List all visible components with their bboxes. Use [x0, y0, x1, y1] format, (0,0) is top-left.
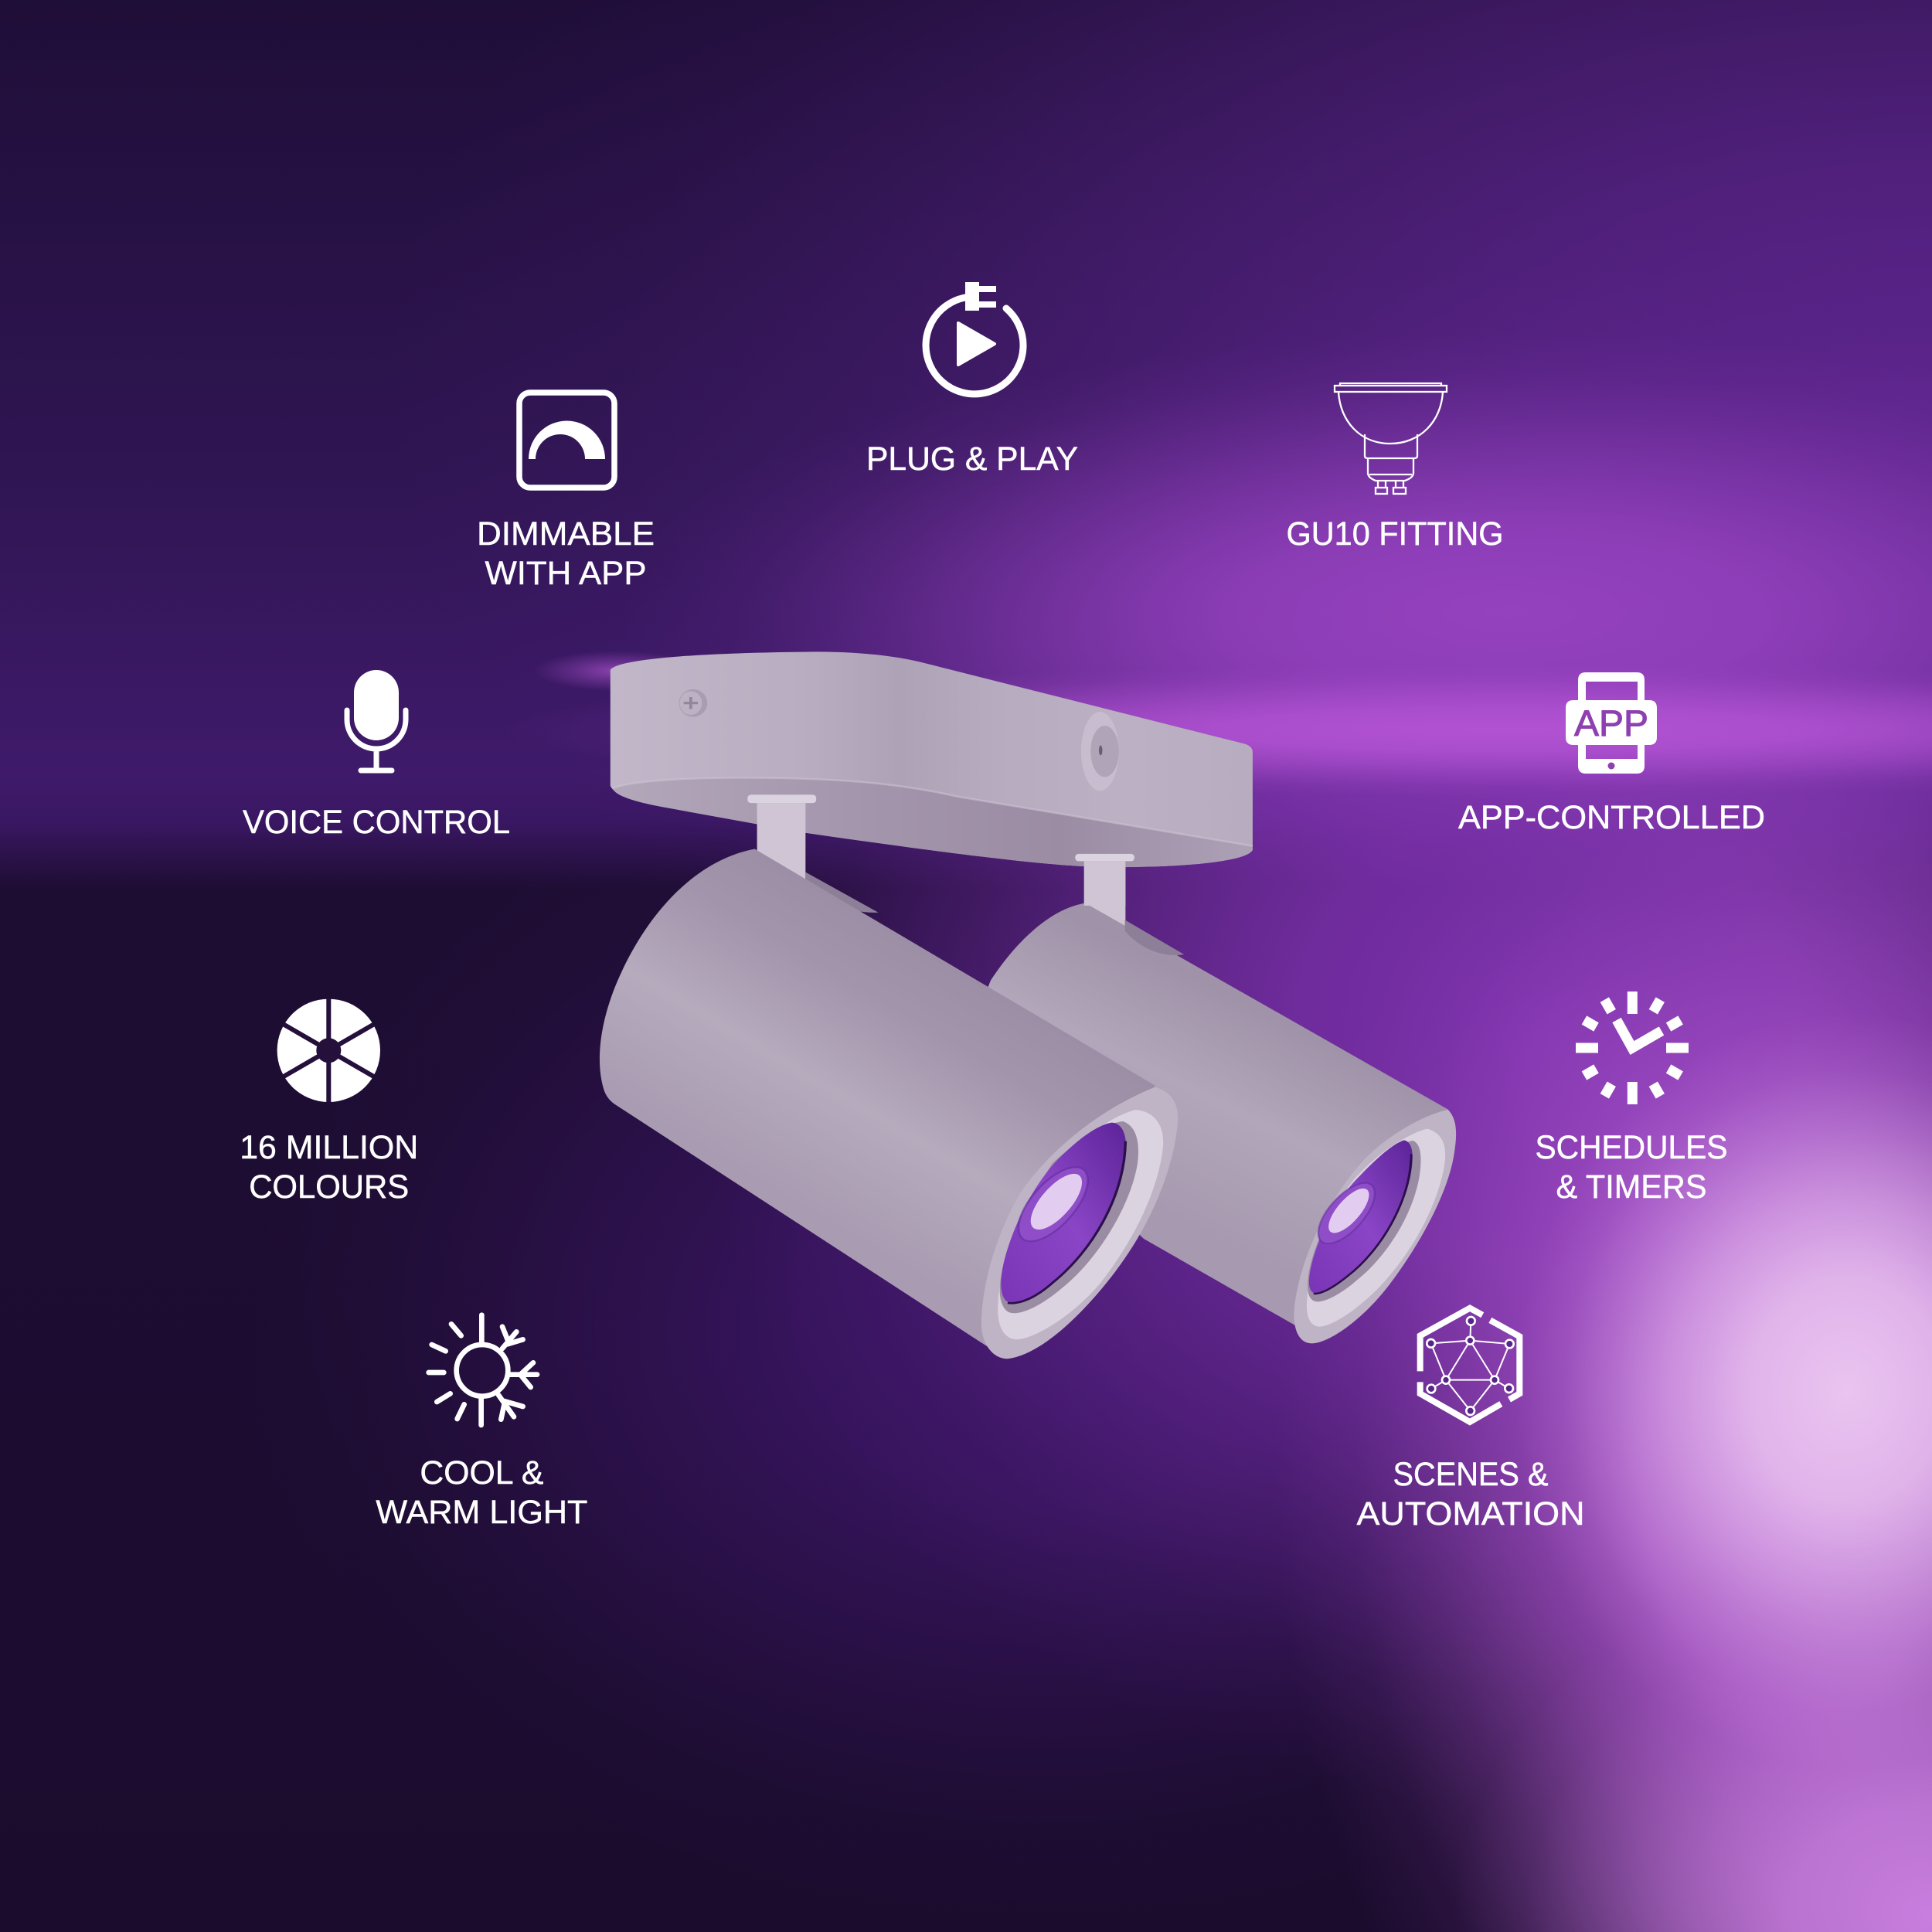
- feature: voice control: [243, 670, 510, 841]
- label: cool & warm light: COOL &: [420, 1454, 544, 1492]
- feature: plug & play: [866, 282, 1078, 478]
- label: 16 million colours: [240, 1129, 418, 1206]
- spotlight fixture: [600, 651, 1456, 1359]
- icon: clock: [1576, 992, 1689, 1104]
- rear arm and body: [958, 860, 1448, 1331]
- label: 16 million colours: 16 MILLION: [240, 1129, 418, 1166]
- front lens face: [981, 1087, 1178, 1359]
- label: 16 million colours: COLOURS: [249, 1168, 409, 1206]
- icon: microphone: [347, 670, 406, 770]
- rear spotlight: [958, 860, 1456, 1343]
- label: app-controlled: APP-CONTROLLED: [1458, 799, 1765, 836]
- label: dimmable with app: WITH APP: [485, 555, 646, 592]
- rear lens face: [1294, 1110, 1456, 1343]
- feature: scenes & automation: [1357, 1308, 1584, 1532]
- label: cool & warm light: WARM LIGHT: [376, 1494, 587, 1531]
- cable grommet: [1081, 712, 1119, 791]
- feature: cool & warm light: [376, 1315, 587, 1531]
- label: dimmable with app: [477, 515, 655, 592]
- front spotlight: [600, 849, 1178, 1359]
- label: plug & play: PLUG & PLAY: [866, 440, 1078, 478]
- icon: dimmer: [519, 393, 614, 488]
- front body: [600, 849, 1155, 1347]
- label: schedules & timers: [1535, 1129, 1728, 1206]
- label: scenes & automation: AUTOMATION: [1357, 1495, 1584, 1532]
- icon: GU10 bulb: [1335, 383, 1447, 494]
- label: schedules & timers: & TIMERS: [1556, 1168, 1706, 1206]
- feature: schedules: [1535, 992, 1728, 1206]
- icon: hexagon network: [1420, 1308, 1519, 1422]
- feature: app control: [1458, 672, 1765, 836]
- label: GU10 fitting: GU10 FITTING: [1286, 515, 1504, 553]
- feature: GU10: [1286, 383, 1504, 553]
- label: cool & warm light: [376, 1454, 587, 1531]
- label: voice control: VOICE CONTROL: [243, 804, 510, 841]
- icon: colour wheel: [277, 998, 380, 1102]
- label: schedules & timers: SCHEDULES: [1535, 1129, 1728, 1166]
- mounting plate: [611, 651, 1253, 906]
- label: scenes & automation: [1357, 1456, 1584, 1532]
- icon: app phone: APP: [1574, 702, 1648, 743]
- icon: plug and play: [926, 282, 1023, 394]
- feature: colours: [240, 998, 418, 1206]
- icon: sun and snowflake: [429, 1315, 537, 1425]
- screw: [679, 689, 707, 717]
- feature: dimmable: [477, 393, 655, 592]
- icon: app phone: [1566, 672, 1657, 774]
- label: dimmable with app: DIMMABLE: [477, 515, 655, 553]
- label: scenes & automation: SCENES &: [1393, 1456, 1549, 1493]
